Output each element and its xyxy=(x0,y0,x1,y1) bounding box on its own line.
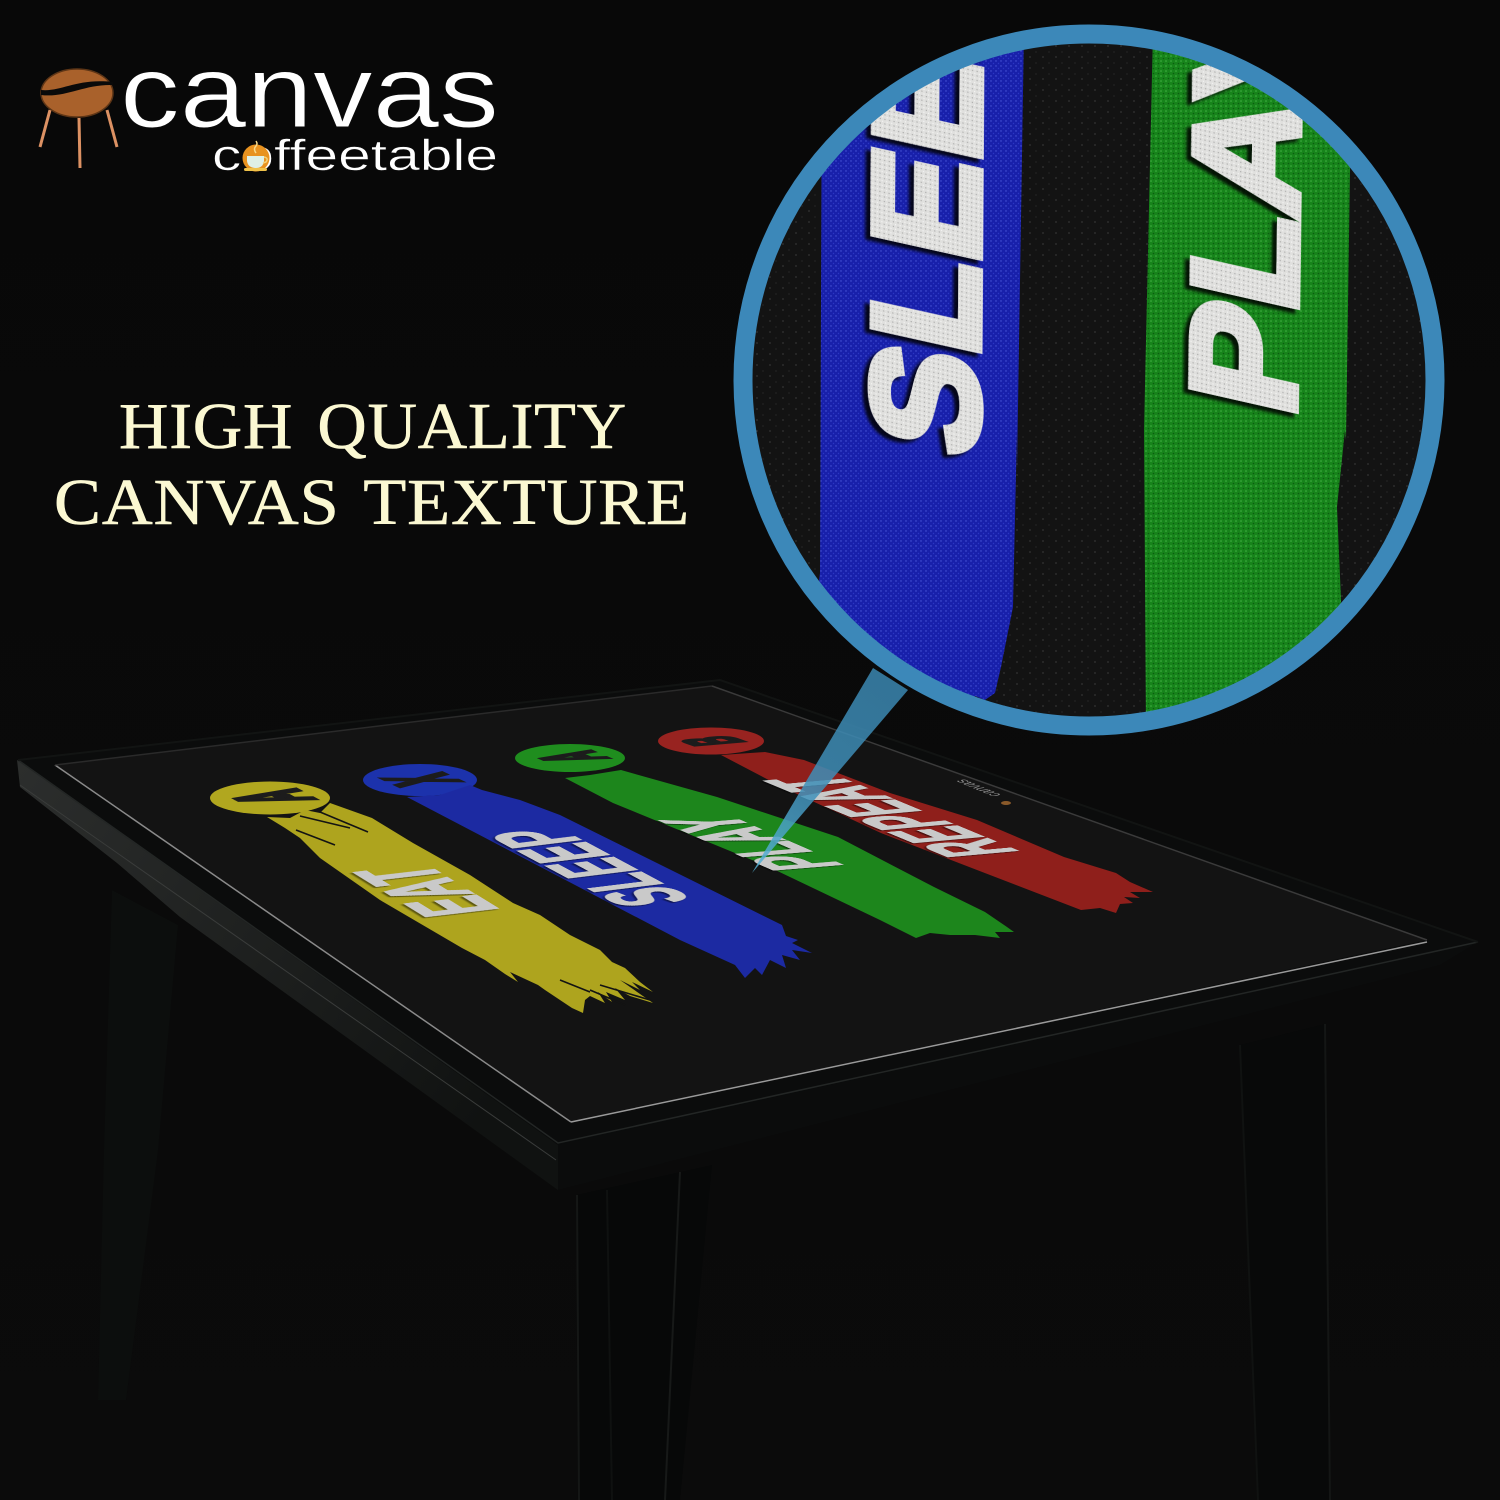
badge letter: A xyxy=(516,749,626,765)
small logo printed on board: canvas xyxy=(951,778,1006,797)
canvas board xyxy=(55,686,1427,1122)
back right leg xyxy=(1240,1024,1330,1500)
brush stripe: sleep xyxy=(363,764,812,978)
stripe badge A xyxy=(210,782,330,814)
brush stripe: play xyxy=(515,744,1014,938)
badge letter: A xyxy=(208,787,336,807)
icon: coffee bean table xyxy=(40,69,117,168)
badge letter: B xyxy=(664,734,762,748)
canvas black background xyxy=(740,30,1440,730)
heading: HIGH QUALITY xyxy=(119,390,627,463)
table top xyxy=(17,680,1478,1190)
stripe badge X xyxy=(363,764,477,796)
icon: coffee cup xyxy=(242,141,270,172)
wordmark coffeetable: coffeetable xyxy=(212,131,498,180)
frame top surface xyxy=(18,680,1478,1145)
callout pointer xyxy=(752,668,908,873)
red brush stroke xyxy=(721,752,1153,913)
label SLEEP: SLEEP xyxy=(468,824,714,911)
wordmark canvas: canvas xyxy=(120,34,499,149)
brush slits xyxy=(296,812,650,1005)
logo xyxy=(40,34,499,180)
enlarged green stripe xyxy=(1144,30,1352,730)
yellow brush stroke xyxy=(267,803,653,1013)
lens contents xyxy=(752,44,1426,716)
magnifier lens xyxy=(740,0,1440,730)
label REPEAT: REPEAT xyxy=(742,772,1041,860)
lens ring xyxy=(743,34,1435,726)
blue brush stroke xyxy=(407,785,812,978)
frame left side face xyxy=(17,760,558,1190)
badge letter: X xyxy=(363,771,479,789)
heading: CANVAS TEXTURE xyxy=(54,466,690,539)
brush stripe: repeat xyxy=(658,728,1153,913)
front corner leg xyxy=(576,1165,712,1500)
enlarged label PLAY: PLAY xyxy=(1159,0,1332,427)
table legs xyxy=(98,890,1330,1500)
stripe badge R xyxy=(658,728,764,754)
stripe badge A xyxy=(515,744,625,772)
small logo printed on board xyxy=(951,778,1011,805)
back left leg xyxy=(98,890,178,1400)
heading xyxy=(54,390,690,539)
enlarged blue stripe xyxy=(819,50,1024,700)
label EAT: EAT xyxy=(331,861,522,921)
brush stripe: eat xyxy=(208,782,653,1013)
frame front face xyxy=(558,942,1478,1190)
green brush stroke xyxy=(565,770,1014,938)
label PLAY: PLAY xyxy=(637,813,866,873)
